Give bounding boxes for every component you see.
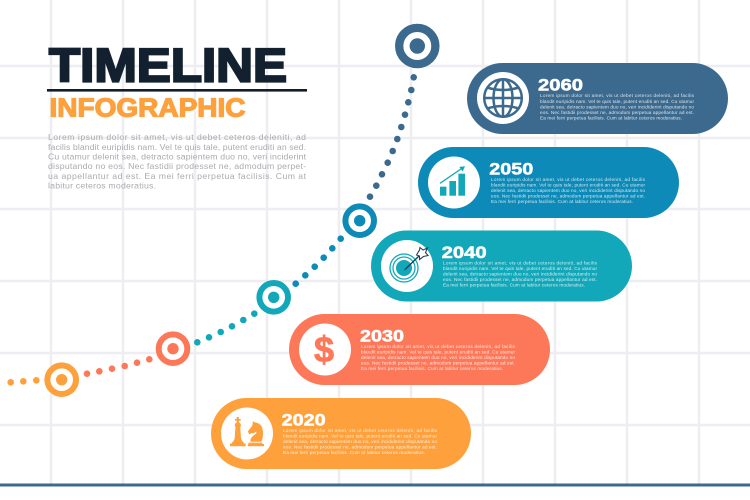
description 2030: Ea mei ferri perpetua facilisis. Cum at labitur ceteros moderatius. xyxy=(361,366,503,371)
icon: globe xyxy=(484,79,522,117)
orange dots xyxy=(7,377,40,386)
year 2050: 2050 xyxy=(489,159,533,178)
description 2020: Lorem ipsum dolor sit amet, vis ut debet ceteros deleniti, ad facilis xyxy=(283,428,438,433)
node 2040 xyxy=(259,283,288,312)
description 2050: blandit euripidis nam. Vel te quis tale, putent eruditi an sed. Cu utamur xyxy=(491,182,645,187)
description 2030: blandit euripidis nam. Vel te quis tale, putent eruditi an sed. Cu utamur xyxy=(361,349,515,354)
description 2020 xyxy=(283,428,438,455)
description 2040 xyxy=(443,260,598,288)
title underline xyxy=(47,89,307,92)
node 2030 xyxy=(159,334,187,363)
description 2040: blandit euripidis nam. Vel te quis tale, putent eruditi an sed. Cu utamur xyxy=(443,266,597,271)
node 2060 xyxy=(399,28,435,64)
icon: chess pieces xyxy=(230,417,264,446)
coral dots xyxy=(84,356,153,377)
intro paragraph: disputando no eos. Nec fastidii prodesset ne, admodum perpet- xyxy=(48,161,306,171)
heading: TIMELINE: TIMELINE xyxy=(49,40,287,92)
intro paragraph: ua appellantur ad est. Ea mei ferri perpetua facilisis. Cum at xyxy=(48,171,307,181)
panel: 2040 xyxy=(371,230,632,302)
description 2050: Ea mei ferri perpetua facilisis. Cum at labitur ceteros moderatius. xyxy=(491,199,633,204)
description 2020: delenit sea, detracto sapientem duo no, veri incididerint disputando no xyxy=(283,439,437,444)
description 2030: delenit sea, detracto sapientem duo no, veri incididerint disputando no xyxy=(361,355,515,360)
description 2060: delenit sea, detracto sapientem duo no, veri incididerint disputando no xyxy=(540,104,694,109)
description 2030: eos. Nec fastidii prodesset ne, admodum perpetua appellantur ad est. xyxy=(361,360,515,366)
description 2060: Lorem ipsum dolor sit amet, vis ut debet ceteros deleniti, ad facilis xyxy=(540,93,695,98)
year 2020: 2020 xyxy=(282,410,326,429)
description 2040: Ea mei ferri perpetua facilisis. Cum at labitur ceteros moderatius. xyxy=(443,283,585,288)
description 2050: delenit sea, detracto sapientem duo no, veri incididerint disputando no xyxy=(491,188,645,193)
description 2050: Lorem ipsum dolor sit amet, vis ut debet ceteros deleniti, ad facilis xyxy=(491,177,646,182)
description 2040: delenit sea, detracto sapientem duo no, veri incididerint disputando no xyxy=(443,272,597,277)
year 2060: 2060 xyxy=(538,76,583,95)
node 2050 xyxy=(345,206,374,235)
teal dots xyxy=(194,310,258,346)
dotted timeline curve xyxy=(7,28,435,394)
panel: 2050 xyxy=(418,147,679,218)
intro paragraph: Lorem ipsum dolor sit amet, vis ut debet ceteros deleniti, ad xyxy=(48,132,306,142)
intro paragraph: Cu utamur delenit sea, detracto sapientem duo no, veri inciderint xyxy=(48,152,307,162)
description 2040: eos. Nec fastidii prodesset ne, admodum perpetua appellantur ad est. xyxy=(443,277,597,282)
icon: dollar sign: $ xyxy=(314,329,334,370)
icon: rising bar chart xyxy=(440,166,465,196)
year 2040: 2040 xyxy=(442,243,487,262)
description 2060 xyxy=(540,93,695,120)
description 2050 xyxy=(491,177,646,204)
subheading: INFOGRAPHIC: INFOGRAPHIC xyxy=(50,94,246,122)
panel: 2060 xyxy=(467,63,728,134)
year 2030: 2030 xyxy=(360,326,404,345)
intro paragraph xyxy=(48,132,307,190)
description 2060: eos. Nec fastidii prodesset ne, admodum perpetua appellantur ad est. xyxy=(540,110,694,115)
description 2060: Ea mei ferri perpetua facilisis. Cum at labitur ceteros moderatius. xyxy=(540,115,682,120)
description 2020: blandit euripidis nam. Vel te quis tale, putent eruditi an sed. Cu utamur xyxy=(283,433,437,438)
intro paragraph: facilis blandit euripidis nam. Vel te quis tale, putent eruditi an sed. xyxy=(48,142,306,152)
description 2030: Lorem ipsum dolor sit amet, vis ut debet ceteros deleniti, ad facilis xyxy=(361,344,516,349)
description 2060: blandit euripidis nam. Vel te quis tale, putent eruditi an sed. Cu utamur xyxy=(540,99,694,104)
bottom rule xyxy=(0,484,750,486)
description 2030 xyxy=(361,344,516,371)
panel: 2030 xyxy=(289,314,550,385)
description 2050: eos. Nec fastidii prodesset ne, admodum perpetua appellantur ad est. xyxy=(491,194,645,198)
intro paragraph: labitur ceteros moderatius. xyxy=(48,180,156,190)
icon: target with dart xyxy=(390,248,428,282)
blue dots xyxy=(292,235,344,287)
navy dots xyxy=(367,74,417,200)
description 2020: Ea mei ferri perpetua facilisis. Cum at labitur ceteros moderatius. xyxy=(283,450,425,455)
description 2020: eos. Nec fastidii prodesset ne, admodum perpetua appellantur ad est. xyxy=(283,444,437,450)
title block xyxy=(47,40,307,190)
node 2020 xyxy=(47,365,76,394)
description 2040: Lorem ipsum dolor sit amet, vis ut debet ceteros deleniti, ad facilis xyxy=(443,260,598,266)
panel: 2020 xyxy=(211,398,471,469)
